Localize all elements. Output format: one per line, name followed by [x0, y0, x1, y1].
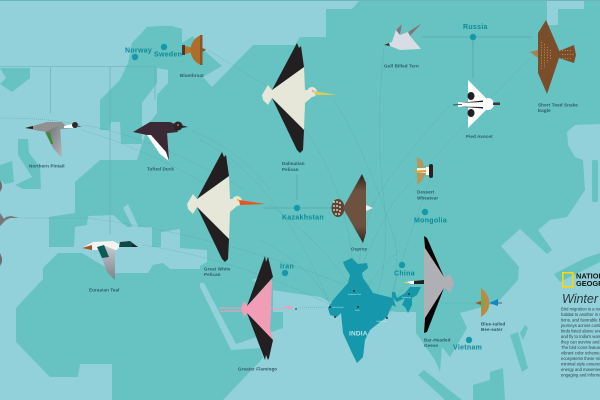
- label: pied avocet: Pied Avocet: [466, 134, 493, 139]
- label: great white pelican: Pelican: [204, 272, 221, 277]
- icon: cropped bird, lower left edge: [0, 253, 2, 266]
- icon: gull billed tern: [384, 23, 422, 50]
- country: Russia: [463, 24, 488, 40]
- label: northern pintail: Northern Pintail: [29, 164, 65, 168]
- India site markers: Chilika Lake: [376, 321, 388, 323]
- leader lines: [263, 37, 532, 208]
- label: blue-tailed bee-eater: [481, 322, 505, 332]
- label: bar-headed geese: [424, 338, 451, 348]
- country: Iran: Iran: [280, 264, 294, 270]
- India site markers: Keoladeo Park: [348, 294, 361, 296]
- icon: cropped bird, left edge with bill: [0, 213, 19, 226]
- label: short toed snake eagle: [538, 102, 578, 113]
- country: Mongolia: [414, 209, 447, 224]
- icon: greater flamingo: [219, 256, 297, 360]
- map: India: [328, 258, 421, 363]
- label: greater flamingo: Greater Flamingo: [238, 366, 277, 372]
- label: eurasian teal: Eurasian Teal: [89, 288, 120, 292]
- label: desert wheatear: Wheatear: [417, 196, 438, 200]
- icon: northern pintail: [25, 122, 82, 158]
- country: China: [394, 262, 415, 278]
- country: Norway: Norway: [125, 48, 152, 54]
- label: dalmatian pelican: [282, 161, 305, 172]
- country: Norway: [125, 48, 152, 60]
- country: Russia: Russia: [463, 24, 488, 31]
- label: blue-tailed bee-eater: Blue-tailed: [481, 322, 505, 326]
- logo: National Geographic: [563, 272, 600, 288]
- icon: blue-tailed bee-eater: [475, 288, 502, 317]
- country: Vietnam: [453, 337, 482, 352]
- India site markers: [329, 290, 412, 323]
- India site markers: Kaziranga: [402, 297, 412, 299]
- icon: eurasian teal: [82, 241, 138, 280]
- icon: tufted duck: [133, 122, 188, 161]
- label: short toed snake eagle: Eagle: [538, 108, 551, 113]
- label: desert wheatear: Dessert: [417, 190, 435, 194]
- icon: great white pelican: [187, 152, 265, 262]
- country: Mongolia: Mongolia: [414, 218, 447, 224]
- icon: dalmatian pelican: [262, 43, 337, 153]
- label: India: INDIA: [349, 330, 368, 338]
- country: Sweden: [154, 44, 182, 58]
- country: China: China: [394, 270, 415, 278]
- label: bar-headed geese: Geese: [424, 343, 438, 348]
- label: gull billed tern: Gull Billed Tern: [384, 64, 419, 68]
- country: Kazakhstan: [282, 205, 324, 222]
- label: desert wheatear: [417, 190, 438, 200]
- label: great white pelican: Great White: [204, 266, 231, 272]
- icon: osprey: [332, 174, 373, 243]
- label: tufted duck: Tufted Duck: [147, 166, 174, 172]
- icon: desert wheatear: [412, 157, 433, 185]
- icon: pied avocet: [453, 80, 500, 128]
- label: short toed snake eagle: Short Toed Snake: [538, 102, 578, 108]
- text block: introduction: [560, 306, 600, 378]
- label: blue-tailed bee-eater: Bee-eater: [481, 327, 503, 332]
- country: Sweden: Sweden: [154, 52, 182, 58]
- country: Kazakhstan: Kazakhstan: [282, 214, 324, 222]
- country: Vietnam: Vietnam: [453, 344, 482, 352]
- label: great white pelican: [204, 266, 231, 277]
- icon: bar-headed goose: [405, 236, 454, 333]
- label: bluethroat: Bluethroat: [180, 73, 204, 78]
- icon: short toed snake eagle: [530, 20, 576, 94]
- migration routes: [0, 48, 530, 318]
- country: Iran: [280, 264, 294, 276]
- icon: cropped bird, upper left edge: [0, 180, 2, 192]
- India site markers: Delhi: [355, 310, 360, 312]
- label: dalmatian pelican: Dalmatian: [282, 161, 305, 166]
- icon: bluethroat: [182, 35, 206, 65]
- label: bar-headed geese: Bar-Headed: [424, 338, 451, 342]
- India site markers: Gulf of Kutch: [332, 306, 344, 309]
- label: osprey: Osprey: [351, 246, 368, 252]
- label: dalmatian pelican: Pelican: [282, 167, 299, 172]
